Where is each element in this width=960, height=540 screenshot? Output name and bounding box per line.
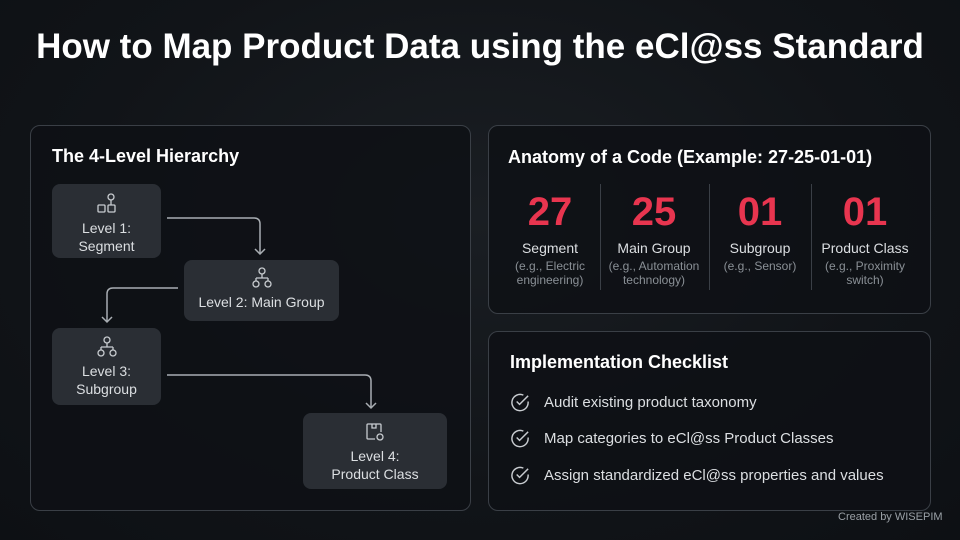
heading: checklist: Implementation Checklist (510, 352, 728, 372)
box: level 4: Product Class (331, 466, 419, 482)
code segments: 01 (843, 190, 887, 234)
box: level 3 (52, 328, 161, 405)
checklist items: Map categories to eCl@ss Product Classes (544, 430, 834, 447)
box: level 1 (52, 184, 161, 258)
box: level 2: Level 2: Main Group (198, 294, 325, 310)
code segments: 27 (528, 190, 572, 234)
checklist items: Assign standardized eCl@ss properties and values (544, 467, 884, 484)
box: level 4: Level 4: (350, 448, 400, 464)
panel: checklist (488, 331, 931, 511)
checklist items: Audit existing product taxonomy (544, 394, 757, 411)
heading: anatomy: Anatomy of a Code (Example: 27-25-01-01) (508, 147, 872, 167)
code segments: Subgroup (730, 240, 790, 256)
box: level 1: Level 1: (82, 220, 131, 236)
code segments: 25 (632, 190, 676, 234)
footer credit: Created by WISEPIM (838, 511, 943, 523)
code segments: (e.g., Proximity switch) (825, 259, 905, 287)
panel: anatomy (488, 125, 931, 314)
code segments: (e.g., Electric engineering) (515, 259, 585, 287)
box: level 3: Level 3: (82, 363, 131, 379)
box: level 3: Subgroup (76, 381, 137, 397)
box: level 2 (184, 260, 339, 321)
box: level 1: Segment (78, 238, 135, 254)
code segments (515, 184, 909, 290)
code segments: Segment (522, 240, 578, 256)
heading: hierarchy: The 4-Level Hierarchy (52, 146, 239, 166)
code segments: (e.g., Automation technology) (609, 259, 699, 287)
code segments: Product Class (821, 240, 909, 256)
panel: hierarchy (30, 125, 471, 511)
box: level 4 (303, 413, 447, 489)
code segments: 01 (738, 190, 782, 234)
code segments: Main Group (617, 240, 691, 256)
title: How to Map Product Data using the eCl@ss Standard (36, 27, 924, 66)
code segments: (e.g., Sensor) (724, 259, 796, 273)
